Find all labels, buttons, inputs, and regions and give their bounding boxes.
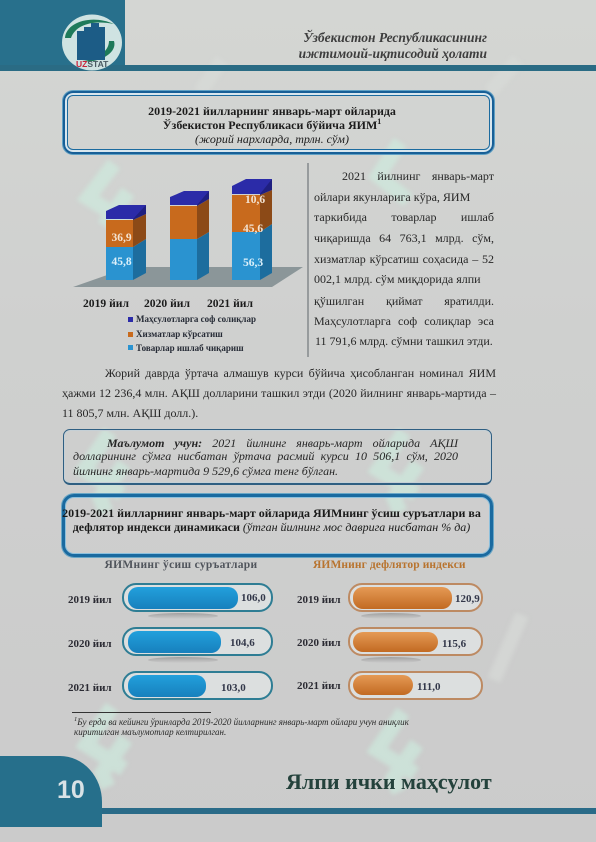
chart legend: Маҳсулотларга соф солиқлар — [136, 314, 256, 324]
row 2019: 2019 йил — [297, 594, 341, 606]
bar 2021: 56,3 — [243, 257, 263, 269]
text block: full width paragraph: Жорий даврда ўртача алмашув курси бўйича ҳисобланган номинал ЯИМ — [105, 366, 496, 380]
bar 2019: 45,8 — [111, 256, 132, 268]
row 2020: 115,6 — [442, 638, 466, 650]
text block: right column: қўшилган қиймат яратилди. — [314, 294, 494, 308]
chart year labels: 2020 йил — [144, 297, 190, 310]
footnote: киритилган маълумотлар келтирилган. — [74, 727, 226, 737]
text block: right column: таркибида товарлар ишлаб — [314, 210, 494, 224]
footer title: Ялпи ички маҳсулот — [286, 769, 492, 794]
panel: GDP heading: 2019-2021 йилларнинг январь-март ойларида — [148, 104, 396, 118]
text block: full width paragraph — [62, 366, 496, 420]
bar 2021: 45,6 — [243, 223, 263, 235]
bar 2019 — [106, 205, 146, 280]
row 2021: 2021 йил — [297, 680, 341, 692]
panel: GDP growth rates chart — [68, 559, 273, 700]
footer band — [0, 756, 596, 827]
bar 2019: 36,9 — [111, 232, 132, 244]
header band — [0, 0, 596, 71]
panel: GDP heading — [63, 91, 494, 154]
row 2021 — [68, 671, 273, 700]
header title: Ўзбекистон Республикасининг — [303, 30, 487, 45]
text block: right column: 2021 йилнинг январь-март — [342, 169, 494, 183]
footnote: 1Бу ерда ва кейинги ўринларда 2019-2020 йилларнинг январь-март ойлари учун аниқлик — [74, 716, 409, 727]
growth heading text: дефлятор индекси динамикаси (ўтган йилнинг мос даврига нисбатан % да) — [73, 520, 470, 534]
panel: GDP heading: Ўзбекистон Республикаси бўйича ЯИМ1 — [163, 117, 381, 132]
callout: for reference: йилнинг январь-мартида 9 529,6 сўмга тенг бўлган. — [73, 464, 338, 478]
growth heading text — [62, 506, 481, 534]
chart legend: Товарлар ишлаб чиқариш — [136, 343, 244, 353]
divider — [307, 163, 309, 357]
text block: right column: чиқаришда 64 763,1 млрд. сўм, — [314, 231, 494, 245]
text block: full width paragraph: 11 805,7 млн. АҚШ долл.). — [62, 406, 198, 420]
chart title: ЯИМнинг дефлятор индекси — [313, 559, 466, 571]
row 2021: 2021 йил — [68, 682, 112, 694]
chart floor — [73, 267, 303, 287]
row 2019 — [297, 583, 483, 618]
row 2021 — [297, 671, 483, 700]
row 2019 — [68, 583, 273, 618]
chart title: ЯИМнинг ўсиш суръатлари — [105, 559, 257, 571]
text block: right column: ойлари якунларига кўра, ЯИМ — [314, 190, 470, 204]
callout: for reference: Маълумот учун: 2021 йилнинг январь-март ойларида АҚШ — [107, 436, 458, 450]
row 2020: 2020 йил — [297, 637, 341, 649]
text block: right column — [314, 169, 494, 348]
header title: ижтимоий-иқтисодий ҳолати — [299, 46, 487, 61]
row 2020 — [297, 627, 483, 662]
chart year labels: 2021 йил — [207, 297, 253, 310]
header title — [299, 30, 487, 61]
page number: 10 — [57, 776, 85, 804]
row 2019: 120,9 — [455, 593, 480, 605]
row 2021: 111,0 — [417, 681, 441, 693]
text block: right column: 11 791,6 млрд. сўмни ташкил этди. — [315, 334, 493, 348]
stacked bar chart: GDP — [73, 179, 303, 287]
row 2020 — [68, 627, 273, 662]
row 2019: 2019 йил — [68, 594, 112, 606]
bar 2021 — [232, 179, 272, 280]
text block: full width paragraph: ҳажми 12 236,4 млн. АҚШ долларини ташкил этди (2020 йилнинг январь-мартида – — [62, 386, 496, 400]
icon: UZSTAT logo: UZSTAT — [76, 59, 109, 69]
footnote — [72, 712, 409, 737]
chart legend: Хизматлар кўрсатиш — [136, 329, 223, 339]
panel: growth heading — [62, 494, 493, 557]
bar 2021: 10,6 — [245, 194, 265, 206]
row 2021: 103,0 — [221, 682, 246, 694]
row 2019: 106,0 — [241, 592, 266, 604]
panel: GDP heading: (жорий нархларда, трлн. сўм) — [195, 132, 349, 146]
chart year labels: 2019 йил — [83, 297, 129, 310]
row 2020: 104,6 — [230, 637, 255, 649]
callout: for reference — [63, 429, 492, 485]
panel: GDP deflator index chart — [297, 559, 483, 700]
text block: right column: 002,1 млрд. сўм миқдорида ялпи — [314, 272, 481, 286]
icon: UZSTAT logo — [62, 14, 122, 70]
callout: for reference: долларининг сўмга нисбатан ўртача расмий курси 10 506,1 сўм, 2020 — [73, 449, 458, 463]
chart year labels — [83, 297, 253, 310]
text block: right column: хизматлар кўрсатиш соҳасида – 52 — [314, 252, 494, 266]
row 2020: 2020 йил — [68, 638, 112, 650]
text block: right column: Маҳсулотларга соф солиқлар эса — [314, 314, 494, 328]
chart legend — [128, 314, 256, 353]
bar 2020 — [170, 191, 209, 280]
growth heading text: 2019-2021 йилларнинг январь-март ойларида ЯИМнинг ўсиш суръатлари ва — [62, 506, 481, 520]
